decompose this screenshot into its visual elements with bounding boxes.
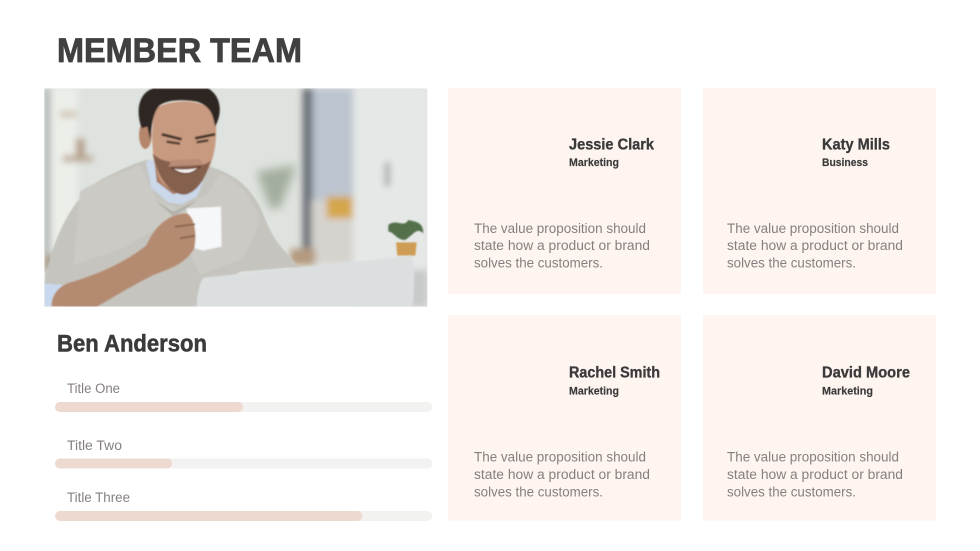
laptop	[197, 256, 414, 308]
skill bar: Title Three	[55, 490, 432, 521]
forearm and hand	[52, 213, 195, 307]
panel: Jessie Clark	[448, 88, 681, 294]
panel: Rachel Smith: state how a product or brand	[474, 467, 650, 482]
smile	[171, 167, 200, 174]
skill bar: Title One: Title One	[67, 381, 120, 396]
panel: David Moore: solves the customers.	[727, 484, 856, 500]
skill bar: Title Two: Title Two	[67, 438, 122, 453]
sweater	[44, 160, 299, 307]
panel: Jessie Clark: Jessie Clark	[569, 136, 654, 154]
panel: Katy Mills: The value proposition should	[727, 221, 899, 236]
panel: David Moore: state how a product or brand	[727, 467, 903, 482]
person name: Ben Anderson: Ben Anderson	[57, 330, 207, 358]
eyebrows and eyes	[162, 134, 215, 139]
skill bar: Title One	[55, 381, 432, 412]
panel: Rachel Smith: Marketing	[569, 386, 619, 398]
panel: Jessie Clark: state how a product or brand	[474, 238, 650, 253]
hair	[139, 88, 220, 140]
panel: Jessie Clark: The value proposition should	[474, 221, 646, 236]
shirt collar	[146, 159, 203, 204]
panel: Jessie Clark: solves the customers.	[474, 256, 603, 270]
panel: Rachel Smith: solves the customers.	[474, 484, 603, 500]
panel: Rachel Smith: The value proposition should	[474, 450, 646, 464]
panel: David Moore: The value proposition should	[727, 450, 899, 464]
panel: David Moore: Marketing	[822, 386, 873, 398]
panel: David Moore: David Moore	[822, 364, 910, 382]
panel: Katy Mills	[703, 88, 936, 294]
panel: Katy Mills: Business	[822, 157, 868, 169]
coffee mug	[187, 207, 222, 251]
panel: Katy Mills: Katy Mills	[822, 136, 890, 154]
panel: Rachel Smith: Rachel Smith	[569, 364, 660, 382]
panel: Katy Mills: state how a product or brand	[727, 238, 903, 253]
panel: David Moore	[703, 315, 936, 520]
photo: man with coffee at laptop	[44, 88, 427, 308]
skill bar: Title Three: Title Three	[67, 490, 130, 505]
ear	[139, 121, 152, 149]
panel: Rachel Smith	[448, 315, 681, 520]
panel: Katy Mills: solves the customers.	[727, 256, 856, 270]
potted plant	[388, 220, 423, 256]
panel: Jessie Clark: Marketing	[569, 157, 619, 169]
title: MEMBER TEAM	[57, 32, 302, 70]
neck and face	[153, 152, 210, 194]
skill bar: Title Two	[55, 438, 432, 468]
